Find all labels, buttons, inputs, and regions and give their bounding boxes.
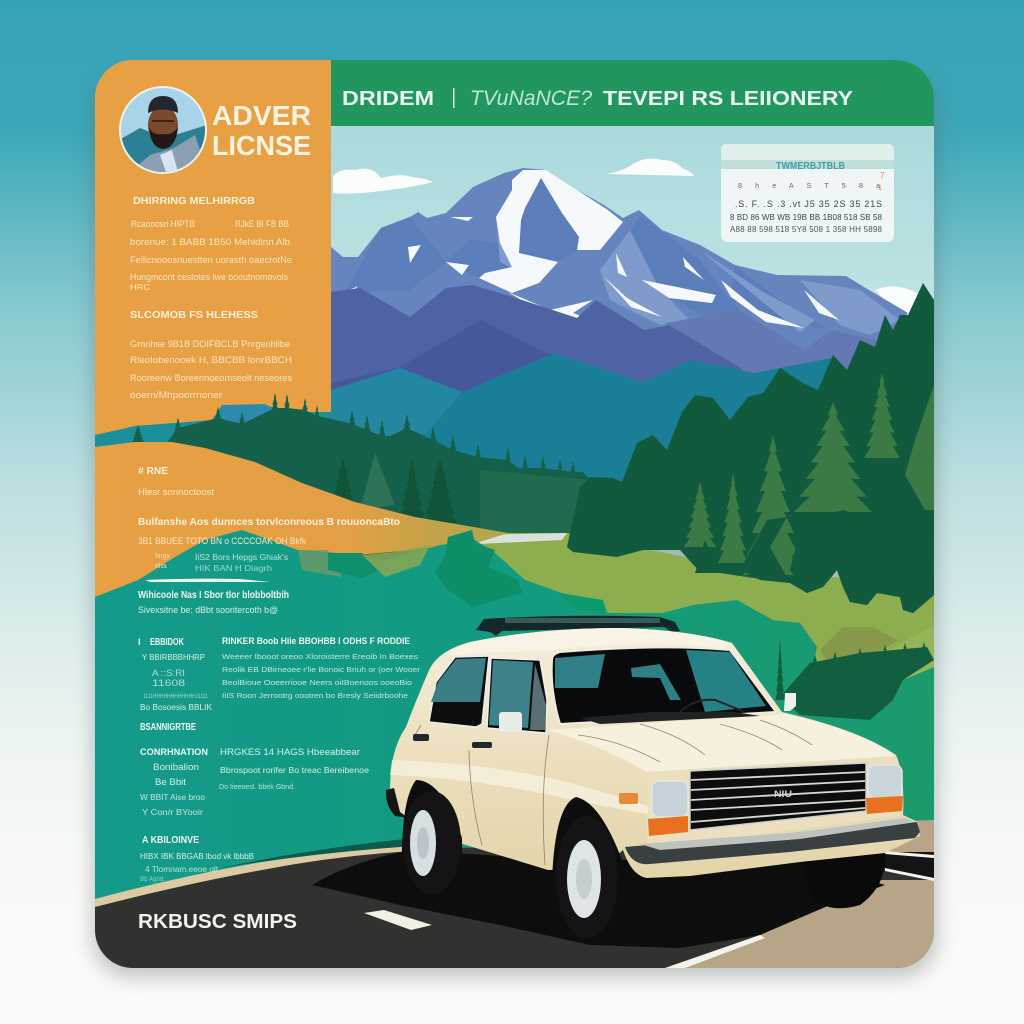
text block: right column one: RINKER Boob Hiie BBOHBB I ODHS F RODDIE (222, 636, 410, 647)
car: roof highlight (450, 628, 732, 655)
text block: teal intro: Sivexsitne be: dBbt sooritercoth b@ (138, 605, 278, 616)
car shadow (312, 850, 885, 948)
text block: orange wave: 3B1 BBUEE TOTO BN o CCCCOAK OH Bkfk (138, 536, 306, 546)
text block: footer notes: Bb Agod. (140, 876, 165, 883)
fade: teal to olive (298, 550, 342, 577)
text block: right column two: Bbrospoot rorifer Bo treac Bereibenoe (220, 766, 370, 775)
portrait (119, 86, 208, 175)
forest: dark foreground clumps (695, 510, 934, 613)
panel: driving details: DHIRRING MELHIRRGB (133, 196, 255, 207)
orange panel: lower wave (95, 442, 508, 600)
text block: details one: Hungmcont cestotes lwe oooutnomovols (130, 272, 288, 282)
text block: left column one: EBBIDOK (150, 637, 185, 648)
text block: footer notes (140, 835, 254, 883)
text block: left column one: 11608 (152, 678, 185, 688)
text block: left column two: W BBIT Aise broo (140, 792, 205, 802)
hill: light meadow (891, 626, 934, 678)
title: license (212, 100, 311, 161)
car (386, 616, 920, 938)
calendar: .S. F. .S .3 .vt J5 35 2S 35 21S (735, 199, 882, 209)
text block: right column one: BeolBioue Ooeerriooe Neers oiIBoenoos ooeoBio (222, 678, 412, 687)
car: rear wheel (403, 791, 461, 895)
text block: footer notes: HIBX IBK BBGAB lbod vk lbbbB (140, 851, 254, 861)
car: hood creases (415, 720, 812, 865)
car: wheel arches (402, 780, 622, 900)
text block: details one: borenue: 1 BABB 1B50 Mehidinn Alb (130, 237, 290, 247)
hill: olive patch (820, 627, 898, 660)
text block: orange wave: HIK BAN H Diagrh (195, 563, 272, 573)
car: right rear wheel (803, 850, 885, 908)
header text (342, 87, 853, 110)
meadow (480, 533, 934, 700)
text block: details one: Fellicnooosnuestten uorasth oaecrotNe (130, 255, 292, 265)
scene: sky (95, 60, 934, 300)
header text: TVuNaNCE? (470, 87, 592, 110)
teal lower area (95, 530, 934, 930)
header text: DRIDEM (342, 87, 434, 110)
text block: right column one: Reolik EB DBirneoee r'lie Bonoic Briuh or (oer Wooer (222, 665, 421, 674)
road (95, 838, 934, 968)
car: mirrors (499, 693, 796, 732)
car: side marker (619, 793, 638, 804)
car: turn signals (648, 796, 903, 836)
text block: left column one: Bo Bosoesis BBLIK (140, 703, 213, 712)
text block: orange wave: IiS2 Bors Hepgs Ghiak's (195, 552, 288, 562)
text block: left column two (140, 747, 208, 817)
text block: right column two: Do Iieeoesl. bbek Gbnd. (219, 782, 295, 791)
calendar: 7 (880, 171, 885, 180)
text block: orange wave: Bulfanshe Aos dunnces torvlconreous B rouuoncaBto (138, 516, 400, 528)
text block: left column one (138, 637, 213, 712)
text block: details two: Grnnhse 9B1B DOIFBCLB Pnrgenhlibe (130, 339, 290, 349)
text block: left column two: Y Con/r BYooir (142, 807, 203, 817)
header bar (331, 60, 934, 126)
snow caps (343, 170, 839, 328)
mountains: front dark layer (331, 285, 744, 383)
text block: right column two (219, 747, 370, 791)
title: license: ADVER (212, 100, 311, 131)
calendar: 1 (878, 185, 882, 192)
car: front bumper (625, 818, 920, 864)
car: headlights (652, 765, 902, 817)
text block: right column one (222, 636, 421, 700)
car: side windows (429, 656, 547, 733)
text block: left column one: 1111HHHHHHHHHHHH11111 (143, 693, 208, 700)
text block: details one: RJkE BI FB BB (235, 219, 289, 229)
text block: details two: Rooreenw Boreennoeomseolt neseores (130, 373, 292, 383)
text block: details one (130, 219, 292, 292)
car: side highlight (390, 760, 648, 814)
mountains: right mid layer (666, 310, 877, 373)
car: rear bumper stub (386, 788, 408, 818)
calendar: 8 BD 86 WB WB 19B BB 1B08 518 SB 58 (730, 213, 883, 222)
calendar (721, 144, 894, 242)
forest: behind car (776, 640, 934, 720)
text block: left column one: Y BBIRBBBHHRP (142, 652, 205, 662)
car: front wheel (556, 816, 618, 938)
forest: right mass (567, 283, 941, 613)
text block: teal intro (138, 590, 289, 616)
mountains: shaded faces (345, 178, 830, 330)
text block: left column two: Bonibalion (153, 762, 199, 773)
road: lane dash (364, 910, 432, 930)
car: door handles (413, 734, 492, 748)
forest: lighter right trees (684, 373, 934, 575)
text block: orange wave: ifa (155, 563, 167, 570)
text block: orange wave (138, 466, 400, 573)
card shadow (92, 70, 938, 978)
panel: driving details (130, 196, 292, 400)
text block: left column one: A ::S:RI (152, 668, 185, 678)
car: roof rack (476, 616, 680, 636)
white divider (145, 579, 270, 582)
text block: left column one: I (138, 637, 141, 647)
heading: section: BSANNIGRTBE (140, 722, 196, 733)
text block: details two: Rleolobenooek H, BBCBB lonrBBCH (130, 355, 292, 365)
calendar: TWMERBJTBLB (776, 161, 845, 172)
calendar: A88 88 598 518 5Y8 508 1 358 HH 5898 (730, 225, 883, 234)
footer heading: RKBUSC SMIPS (138, 911, 297, 933)
mountains: back range (331, 168, 908, 350)
car: body (390, 628, 920, 878)
road: right shoulder (665, 820, 934, 968)
text block: left column two: Be Bbit (155, 777, 186, 788)
pond (473, 533, 567, 544)
forest: left treeline (130, 393, 600, 560)
text block: orange wave: # RNE (138, 466, 168, 477)
calendar: 8 h e A S T 5 8 a (738, 183, 880, 190)
text block: details two (130, 339, 292, 400)
text block: right column one: IiIS Roon Jerrootrg oootren bo Bresly Seiidrboohe (222, 691, 408, 700)
mountains: deep ridge (331, 320, 550, 392)
text block: left column two: CONRHNATION (140, 747, 208, 758)
text block: footer notes: 4 Tlomnam.eeoe olt (145, 865, 219, 874)
text block: teal intro: Wihicoole Nas I Sbor tlor blobboltbih (138, 590, 289, 601)
header text: TEVEPI RS LEIIONERY (603, 87, 853, 110)
car: windshield (552, 647, 776, 724)
bushes (328, 530, 607, 613)
car: hood light (548, 714, 896, 772)
title: license: LICNSE (212, 130, 311, 161)
text block: right column one: Weeeer Ibooot oreoo Xloroisterre Ereoib In Boexes (222, 652, 418, 661)
car: grille (690, 763, 866, 830)
text block: details one: Rcaooosri HIPTB (131, 219, 195, 229)
text block: right column two: HRGKES 14 HAGS Hbeeabbear (220, 747, 360, 757)
text block: orange wave: Hlesr sonnoctoost (138, 487, 215, 497)
forest: tonal trees (334, 454, 586, 534)
card (95, 60, 941, 968)
text block: details two: ooern/Mhpoorrnoner (130, 390, 222, 400)
hills: teal (331, 353, 832, 482)
clouds (333, 158, 934, 320)
text block: orange wave: Ilngy (155, 553, 170, 560)
orange panel: top (95, 60, 331, 460)
mountains: pale faces (496, 218, 898, 335)
text block: footer notes: A KBILOINVE (142, 835, 199, 846)
panel: driving details: SLCOMOB FS HLEHESS (130, 310, 258, 321)
car: fascia (647, 756, 903, 850)
car: grille: NIU (774, 789, 792, 799)
text block: details one: HRC (130, 283, 150, 292)
